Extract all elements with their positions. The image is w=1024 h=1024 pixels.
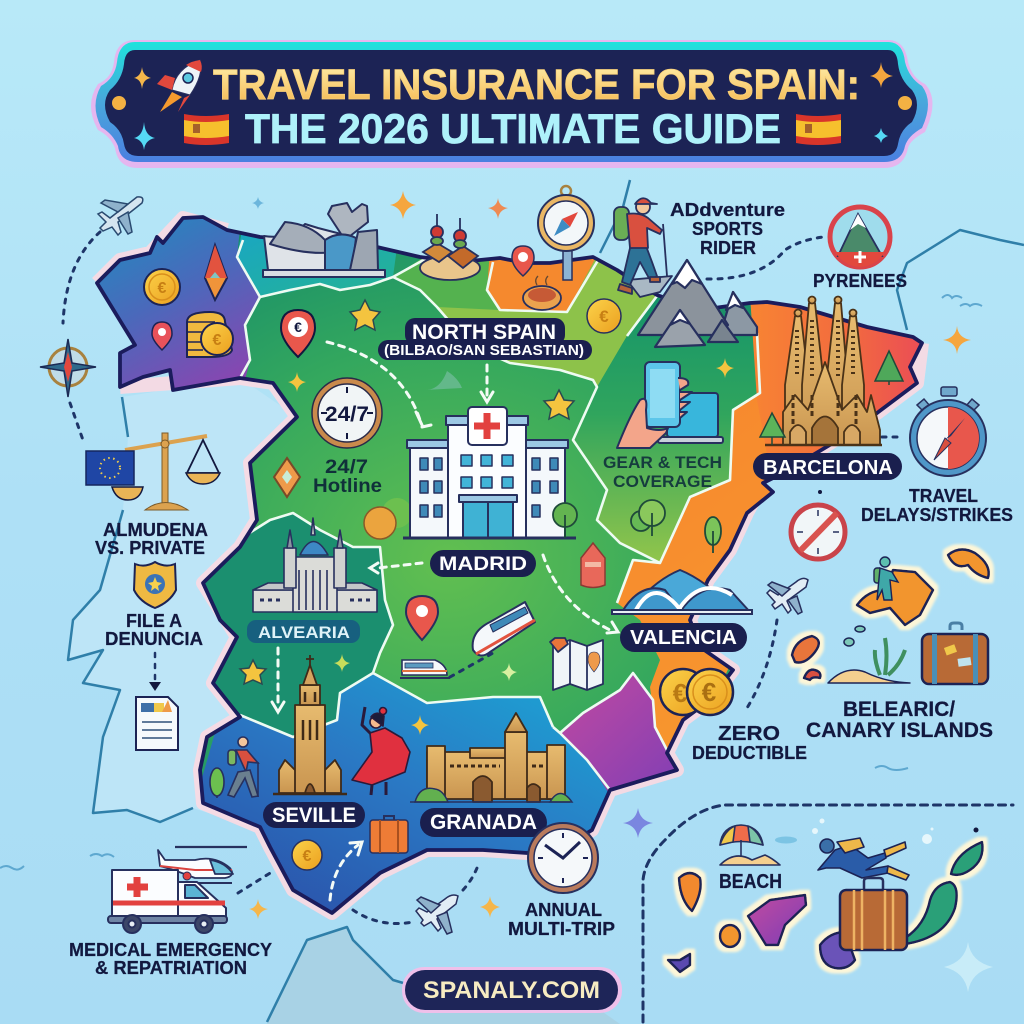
bubbles <box>775 818 934 844</box>
label: file a denuncia: DENUNCIA <box>105 629 203 649</box>
label: adventure sports rider <box>670 200 785 258</box>
icon: euro pin: € <box>294 319 302 335</box>
label: Alvearia: ALVEARIA <box>258 623 350 642</box>
icon: folded map <box>550 638 603 690</box>
icon: tapas <box>420 214 480 280</box>
icon: hiker <box>614 198 672 297</box>
label: annual multi-trip: MULTI-TRIP <box>508 919 615 939</box>
label: Valencia <box>620 623 747 652</box>
icon: phone in hand and laptop <box>617 362 723 448</box>
label: Pyrenees: PYRENEES <box>813 271 907 291</box>
label: Balearic/Canary Islands: CANARY ISLANDS <box>806 719 993 742</box>
label: 24/7 hotline: Hotline <box>313 476 382 497</box>
icon: beach umbrella <box>720 825 780 865</box>
small dot above Lanzarote <box>974 828 978 832</box>
icon: stopwatch <box>910 387 986 476</box>
label: zero deductible: ZERO <box>718 723 780 745</box>
icon: lantern <box>581 543 605 588</box>
icon: Bilbao Guggenheim museum <box>263 203 385 277</box>
icon: helicopter <box>158 847 247 883</box>
icon: tree beside hospital <box>553 503 577 538</box>
icon: high speed train <box>473 602 535 656</box>
icon: suitcase south <box>370 816 408 853</box>
icon: City of Arts Valencia <box>612 570 752 614</box>
icon: orange pin and paella <box>512 246 561 310</box>
label: Alvearia <box>247 620 360 643</box>
icon: hiker and tree south <box>210 737 258 798</box>
icon: small train <box>400 660 450 678</box>
label: Granada: GRANADA <box>430 811 537 834</box>
label: Barcelona: BARCELONA <box>763 457 893 479</box>
icon: prohibited clock <box>791 490 845 559</box>
icon: compass on post <box>538 186 594 280</box>
label: adventure sports rider: SPORTS <box>692 219 763 239</box>
neighbouring land: Portugal, France, Africa <box>68 180 1024 1024</box>
icon: police badge <box>134 562 176 608</box>
label: file a denuncia: FILE A <box>126 611 182 631</box>
label: zero deductible <box>692 723 807 763</box>
icon: map pin centre <box>406 596 438 640</box>
icon: scales with EU flag <box>86 433 220 510</box>
icon: pine trees at Barcelona <box>760 351 903 445</box>
icon: plane right <box>767 578 808 614</box>
icon: orange and bush <box>364 498 412 539</box>
label: 24/7 hotline <box>313 457 382 497</box>
dotted travel routes <box>63 232 1013 1022</box>
sparkles and lights in banner <box>112 62 912 150</box>
label: travel delays/strikes: TRAVEL <box>909 486 978 506</box>
label: Almudena vs. private <box>95 520 208 558</box>
icon: suitcase Canary <box>840 878 907 950</box>
website pill <box>402 967 622 1013</box>
label: travel delays/strikes <box>861 486 1013 525</box>
icon: gold star <box>350 300 380 330</box>
label: North Spain: (BILBAO/SAN SEBASTIAN) <box>384 342 584 359</box>
beach with seaweed <box>828 626 910 683</box>
icon: Pyrenees badge <box>830 207 890 267</box>
icon: Sagrada Familia <box>765 296 882 445</box>
icon: Seville Giralda <box>273 655 347 794</box>
icon: plane bottom <box>416 895 458 934</box>
label: medical emergency and repatriation: & REPATRIATION <box>95 958 247 978</box>
icon: document <box>136 697 178 750</box>
arrow down to form <box>149 682 161 691</box>
icon: euro coin north <box>587 299 621 333</box>
icon: small hiker on Mallorca <box>874 557 898 600</box>
label: North Spain: NORTH SPAIN <box>412 321 556 344</box>
icon: ambulance <box>108 870 227 933</box>
label: annual multi-trip <box>508 900 615 939</box>
label: Almudena vs. private: VS. PRIVATE <box>95 538 205 558</box>
Canary islands <box>668 842 982 972</box>
icon: scuba diver <box>818 838 909 880</box>
label: Balearic/Canary Islands: BELEARIC/ <box>843 698 955 721</box>
icon: flamenco dancer <box>352 707 410 795</box>
dashed white arrows on map <box>272 342 618 900</box>
label: Valencia: VALENCIA <box>630 627 737 649</box>
label: annual multi-trip: ANNUAL <box>525 900 602 920</box>
label: Granada <box>420 808 547 837</box>
title line 2: THE 2026 ULTIMATE GUIDE <box>245 105 781 152</box>
small hill <box>425 371 462 390</box>
label: zero deductible: DEDUCTIBLE <box>692 743 807 763</box>
label: adventure sports rider: RIDER <box>700 238 756 258</box>
label: Almudena vs. private: ALMUDENA <box>103 520 208 540</box>
regions clipped to the coast <box>80 200 940 930</box>
icon: euro coin south <box>292 840 322 870</box>
icon: star near hospital <box>544 390 574 419</box>
map of Spain <box>80 200 940 930</box>
icon: 24/7 clock <box>312 378 382 448</box>
label: gear and tech coverage: GEAR & TECH <box>603 453 722 472</box>
label: gear and tech coverage <box>603 453 722 491</box>
title banner <box>91 40 932 168</box>
icon: plane top left <box>98 197 143 235</box>
label: North Spain <box>378 318 592 360</box>
label: medical emergency and repatriation <box>69 940 272 978</box>
label: medical emergency and repatriation: MEDICAL EMERGENCY <box>69 940 272 960</box>
label: file a denuncia <box>105 611 203 649</box>
title line 1: TRAVEL INSURANCE FOR SPAIN: <box>213 61 860 109</box>
website pill: SPANALY.COM <box>423 977 600 1004</box>
bushes by castle <box>410 788 572 802</box>
sparkles <box>249 191 993 992</box>
flags <box>184 114 841 145</box>
icons: Galicia coins, diamond, pin <box>144 245 233 357</box>
icon: hospital <box>403 407 576 538</box>
icon: mountains <box>638 260 757 347</box>
Balearic islands <box>792 549 989 680</box>
icon: compass rose <box>40 339 96 397</box>
icons: Galicia coins, diamond, pin: € <box>158 280 167 297</box>
icon: euro coin south: € <box>303 848 312 865</box>
label: travel delays/strikes: DELAYS/STRIKES <box>861 505 1013 525</box>
icon: euro coins Valencia: € <box>673 678 687 708</box>
icon: euro coins Valencia: € <box>702 677 716 707</box>
sea waves <box>0 295 982 870</box>
rocket icon <box>157 60 202 112</box>
icon: star west <box>240 660 266 684</box>
icon: trees <box>631 500 721 553</box>
icon: Almudena building <box>253 518 377 612</box>
icon: annual clock <box>528 823 598 893</box>
internal borders <box>237 240 760 790</box>
label: 24/7 hotline: 24/7 <box>325 457 368 478</box>
label: Seville: SEVILLE <box>272 804 356 827</box>
label: Madrid <box>430 550 536 577</box>
label: Madrid: MADRID <box>439 554 527 575</box>
icons: Galicia coins, diamond, pin: € <box>213 332 222 349</box>
label: adventure sports rider: ADdventure <box>670 200 785 220</box>
icon: euro coins Valencia <box>660 669 733 715</box>
icon: Alhambra castle <box>427 713 565 802</box>
icon: 24/7 clock: 24/7 <box>325 403 369 426</box>
icon: euro pin <box>281 310 315 357</box>
label: Barcelona <box>753 453 902 480</box>
icon: gem <box>274 458 300 497</box>
label: Balearic/Canary Islands <box>806 698 993 742</box>
label: Beach: BEACH <box>719 871 782 893</box>
coastline <box>97 217 922 913</box>
icon: euro coin north: € <box>599 307 609 326</box>
icon: suitcase Balearic <box>922 623 988 684</box>
label: gear and tech coverage: COVERAGE <box>613 472 712 491</box>
